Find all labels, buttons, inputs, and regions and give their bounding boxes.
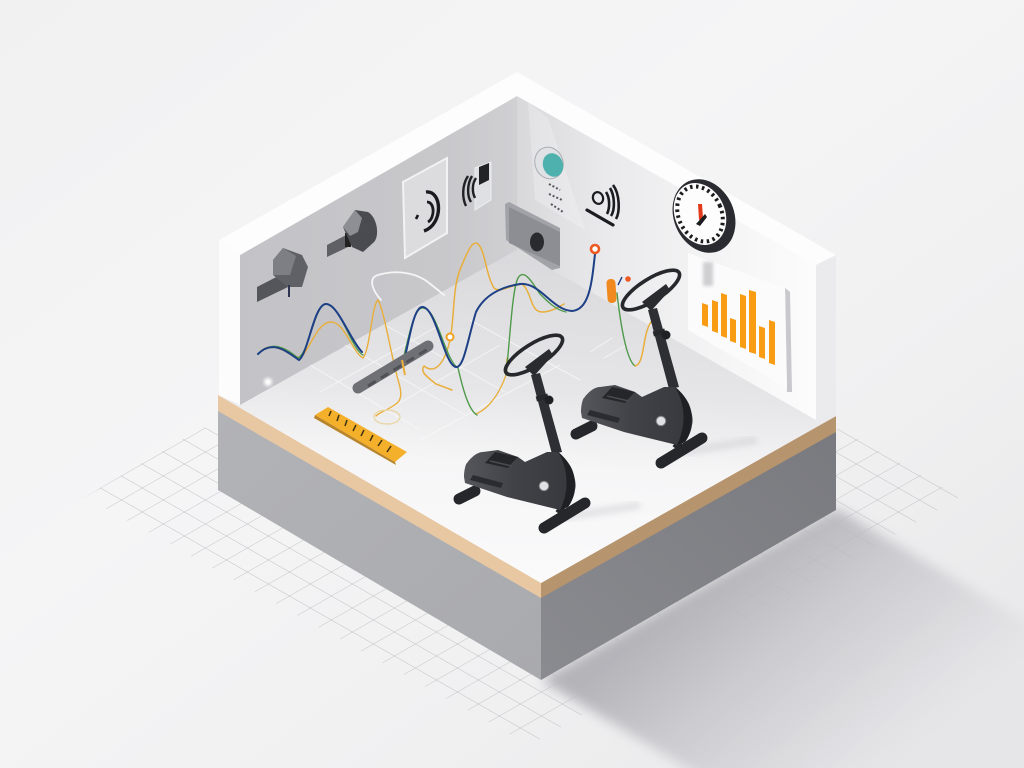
icon: phone with signal waves [463,162,491,210]
icon: teal globe with caption lines [530,143,568,212]
bar chart poster [688,253,792,392]
left wall front end [219,240,240,405]
left wall [240,96,517,405]
top rim [219,72,836,265]
right wall front end [816,255,836,427]
ring loop [374,410,400,424]
white wave [372,272,444,300]
orange wave three [476,358,507,414]
corner highlight [528,102,585,230]
floor tile markings [310,320,625,440]
green wave [260,275,566,415]
right wall [517,96,816,420]
icon: signal waves and wand [587,185,619,225]
base left face [218,410,541,680]
ground shadow [541,508,1024,768]
wall clock [661,169,747,263]
orange knot [446,334,454,340]
tan band left [218,395,541,598]
wave lines [258,243,651,424]
yellow ruler [314,407,407,465]
navy wave [258,254,595,367]
floor rail device [358,346,428,388]
base right face [541,431,836,680]
orange wave one [260,300,401,416]
right wave [617,293,635,366]
wall speaker box [505,202,560,270]
exercise bike: rear [576,263,757,463]
orange signal nodes [591,245,631,303]
icon: wall sensor one [257,248,308,302]
chart bars [702,290,775,365]
orange wave two [423,243,564,390]
floor [218,250,836,583]
wall light spot [264,378,272,386]
tan band right [541,416,836,598]
exercise bike: front [459,328,640,528]
room base block [218,395,836,680]
wall panel with sound arcs [403,158,447,258]
icon: wall sensor two [327,210,377,257]
wire mesh ground grid [85,427,960,745]
